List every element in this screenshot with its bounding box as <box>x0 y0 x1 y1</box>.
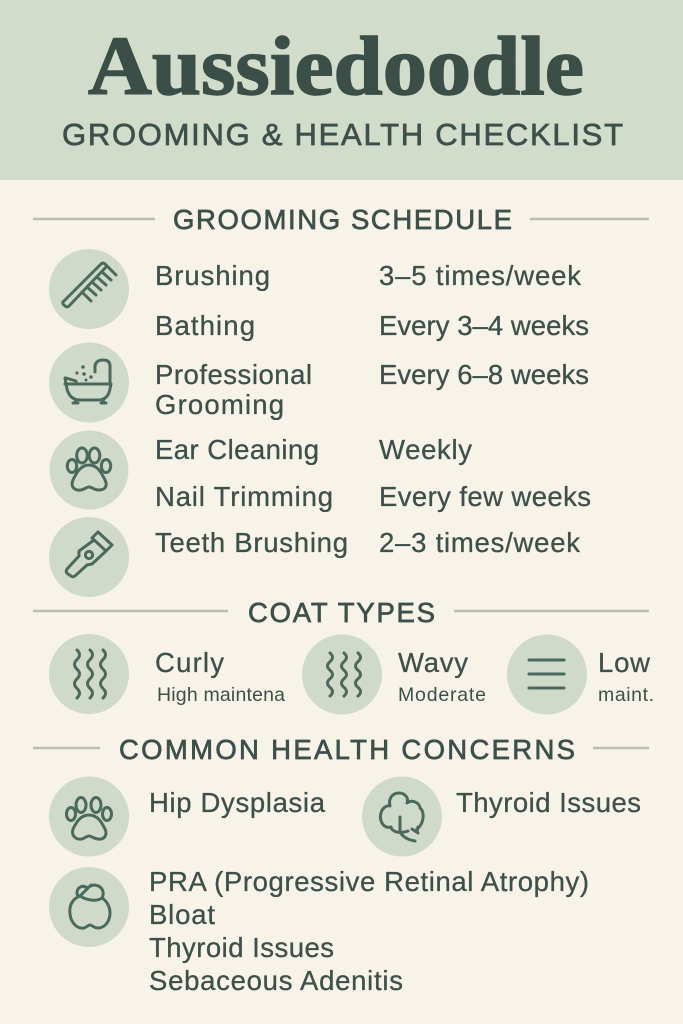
title: Aussiedoodle <box>88 20 584 113</box>
icon: comb <box>49 249 129 329</box>
heading: grooming schedule: GROOMING SCHEDULE <box>173 204 512 235</box>
grooming schedule list: Every 6–8 weeks <box>379 359 589 390</box>
coat: low label: maint. <box>598 684 654 706</box>
icon: low-shedding coat <box>507 634 587 714</box>
health concerns list: Thyroid Issues <box>149 932 334 963</box>
grooming schedule list: Every few weeks <box>379 481 591 512</box>
coat: wavy label: Wavy <box>398 647 468 678</box>
grooming schedule list: Every 3–4 weeks <box>379 310 589 341</box>
icon: paw, hip dysplasia <box>49 776 129 856</box>
grooming schedule list: Grooming <box>155 389 284 420</box>
icon: stomach <box>49 867 129 947</box>
icon: thyroid <box>362 776 442 856</box>
label: thyroid issues: Thyroid Issues <box>456 787 641 818</box>
coat: curly label <box>155 647 285 706</box>
grooming schedule list: Teeth Brushing <box>155 527 348 558</box>
grooming schedule list: Weekly <box>379 434 472 465</box>
header banner <box>0 0 683 180</box>
icon: bathtub <box>49 342 129 422</box>
icon: curly coat <box>49 634 129 714</box>
icon: wavy coat <box>302 634 382 714</box>
health concerns list: Sebaceous Adenitis <box>149 965 403 996</box>
health concerns list: PRA (Progressive Retinal Atrophy) <box>149 866 589 897</box>
heading: coat types: COAT TYPES <box>248 597 435 628</box>
grooming schedule list: Bathing <box>155 310 255 341</box>
grooming schedule list: 3–5 times/week <box>379 260 581 291</box>
coat: curly label: Curly <box>155 647 224 678</box>
label: hip dysplasia: Hip Dysplasia <box>149 787 326 818</box>
health concerns list <box>149 866 589 996</box>
grooming schedule list <box>155 260 591 558</box>
coat: wavy label: Moderate <box>398 684 486 706</box>
coat: low label <box>598 647 654 706</box>
grooming schedule list: Ear Cleaning <box>155 434 319 465</box>
grooming schedule list: Professional <box>155 359 312 390</box>
coat: low label: Low <box>598 647 650 678</box>
grooming schedule list: Nail Trimming <box>155 481 333 512</box>
subtitle: GROOMING & HEALTH CHECKLIST <box>62 117 623 152</box>
icon: clipper <box>49 517 129 597</box>
coat: curly label: High maintena <box>157 684 285 706</box>
grooming schedule list: 2–3 times/week <box>379 527 580 558</box>
grooming schedule list: Brushing <box>155 260 270 291</box>
icon: paw <box>50 430 128 510</box>
health concerns list: Bloat <box>149 899 215 930</box>
coat: wavy label <box>398 647 486 706</box>
heading: common health concerns: COMMON HEALTH CONCERNS <box>119 734 575 765</box>
